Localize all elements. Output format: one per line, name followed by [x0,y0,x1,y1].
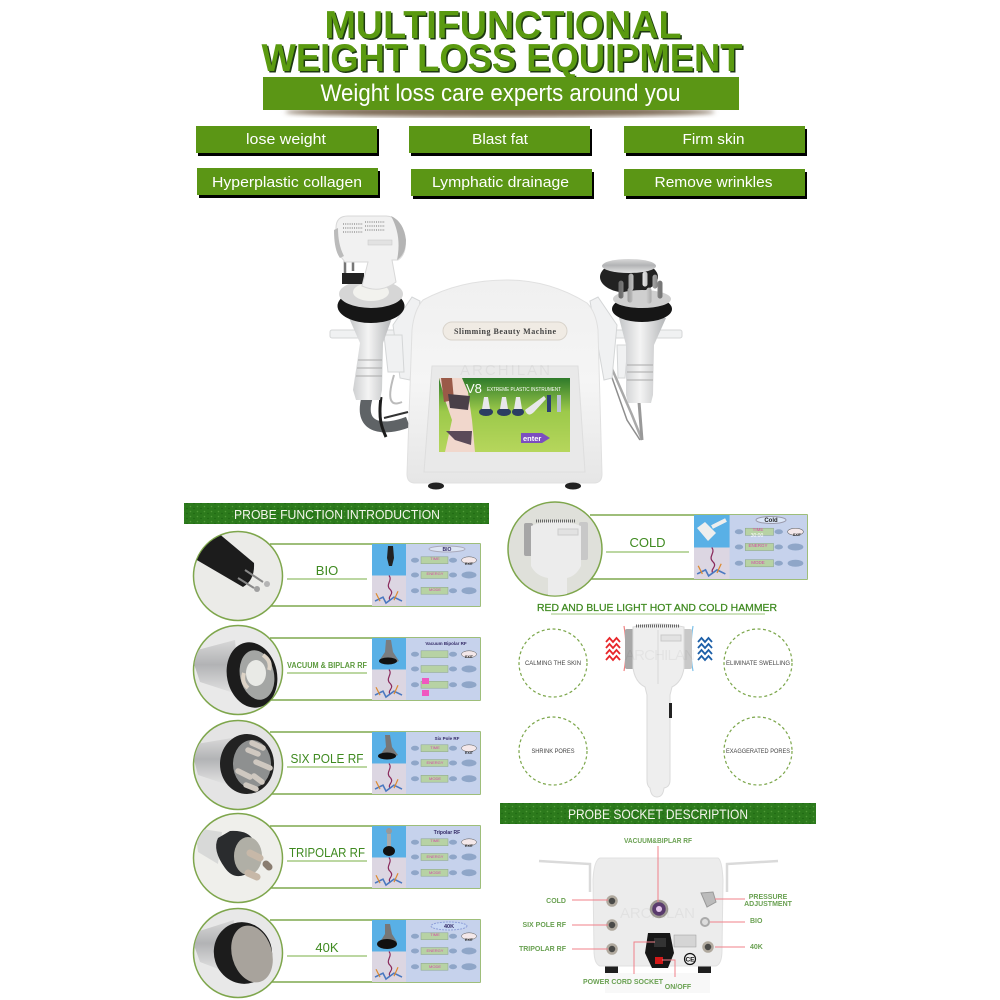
name plate [443,322,567,340]
left vacuum probe [338,280,404,400]
button: firm skin: Firm skin [682,131,744,148]
screen: BIO: ENERGY [427,571,444,576]
name plate: Slimming Beauty Machine [454,327,556,336]
bezel [424,366,585,472]
screen: cold [694,515,807,579]
screen: six pole RF: EXIT [465,751,474,755]
button: lose weight: lose weight [246,131,327,148]
callout: exaggerated pores [724,717,792,785]
screen: tripolar RF: MODE [429,870,441,875]
label: power cord socket: POWER CORD SOCKET [583,979,664,986]
screen: cold: Cold [764,518,778,524]
screen: six pole RF: Six Pole RF [435,736,460,741]
photo circle: six pole RF [190,720,282,810]
screen: 40K: ENERGY [427,948,444,953]
subtitle banner [263,77,739,117]
power panel [645,933,674,968]
rear feet [605,965,711,973]
screen: cold: ENERGY [748,543,768,548]
screen: six pole RF: TIME [430,745,440,750]
reflection [605,973,710,993]
CE mark [684,954,696,964]
label: 40K: 40K [315,940,339,955]
screen: 40K [372,920,480,982]
label: BIO: BIO [316,563,338,578]
screen: BIO: EXIT [465,562,474,566]
main machine photo [330,216,682,490]
screen: six pole RF [372,732,480,794]
callout: shrink pores [519,717,587,785]
label: cold: COLD [629,535,666,550]
acrylic holders [330,297,682,380]
sockets [608,896,712,954]
CE mark: CE [685,956,695,964]
screen: 40K: EXIT [465,938,474,942]
screen: BIO: BIO [443,547,452,553]
screen: vacuum and biplar RF: Vacuum Bipolar RF [425,641,467,646]
icon: blue cold waves [691,626,712,671]
callout: eliminate swelling [724,629,792,697]
screen: 40K: 40K [444,924,454,930]
callout: exaggerated pores: EXAGGERATED PORES [726,749,790,755]
screen: vacuum and biplar RF [372,638,480,700]
screen: 40K: TIME [430,932,440,937]
machine cables [365,355,642,440]
screen: tripolar RF [372,826,480,888]
screen: tripolar RF: Tripolar RF [434,830,460,836]
button: firm skin [624,126,807,156]
section header: probe function introduction [184,503,489,524]
photo circle: 40K [190,908,282,998]
section header: probe socket description: PROBE SOCKET DESCRIPTION [568,806,748,822]
probe row: six pole RF [190,720,480,810]
button: remove wrinkles [624,169,807,199]
screen: six pole RF: ENERGY [427,760,444,765]
screen: cold: TIME [753,527,763,532]
device rear photo [539,858,778,993]
button: hyperplastic collagen: Hyperplastic collagen [212,174,362,191]
hammer device [625,624,692,797]
button: blast fat: Blast fat [472,131,529,148]
probe row: 40K [190,908,480,998]
button: hyperplastic collagen [197,168,380,198]
photo circle: BIO [190,532,282,620]
label: vacuum and biplar RF: VACUUM & BIPLAR RF [287,661,367,670]
label: tripolar socket: TRIPOLAR RF [519,946,567,953]
watermarks: ARCHILAN [625,647,695,664]
photo circle: vacuum and biplar RF [190,626,283,714]
benefit buttons [196,126,807,199]
watermarks [460,362,695,922]
screen: BIO: MODE [429,587,441,592]
machine body [407,280,602,483]
screen: tripolar RF: TIME [430,838,440,843]
button: lymphatic drainage [411,169,594,199]
title [262,4,744,82]
cold hammer on holder [334,216,406,289]
watermarks: ARCHILAN [620,905,695,922]
callout: shrink pores: SHRINK PORES [532,749,574,755]
machine screen: enter [523,434,541,443]
screen: six pole RF: MODE [429,776,441,781]
machine feet [428,482,581,490]
label: bio socket: BIO [750,918,763,925]
screen: BIO [372,544,480,606]
photo circle: cold [508,502,602,600]
section header: probe function introduction: PROBE FUNCTION INTRODUCTION [234,507,440,522]
subtitle banner: Weight loss care experts around you [320,80,680,107]
probe row: cold [508,502,807,600]
label: six pole socket: SIX POLE RF [522,922,567,929]
label: six pole RF: SIX POLE RF [290,751,364,766]
socket labels [519,838,793,991]
rear wings [539,861,778,892]
screen: 40K: MODE [429,964,441,969]
screen: cold: 30:00 [751,533,763,539]
callout: calming the skin: CALMING THE SKIN [525,661,581,667]
callout: eliminate swelling: ELIMINATE SWELLING [726,661,790,667]
label: cold socket: COLD [546,898,566,905]
section header: probe socket description [500,803,816,824]
watermarks: ARCHILAN [460,362,550,379]
label: vacuum biplar: VACUUM&BIPLAR RF [624,838,693,845]
heading: red and blue light hammer: RED AND BLUE LIGHT HOT AND COLD HAMMER [537,602,777,614]
machine screen: V8 [466,381,482,396]
label: 40K socket: 40K [750,944,763,951]
button: remove wrinkles: Remove wrinkles [654,174,772,191]
screen: cold: MODE [751,560,765,565]
screen: BIO: TIME [430,556,440,561]
right probes [600,259,672,403]
probe row: tripolar RF [194,814,480,902]
screen: tripolar RF: ENERGY [427,854,444,859]
rating label [674,935,696,947]
probe row: vacuum and biplar RF [190,626,480,714]
machine screen: EXTREME PLASTIC INSTRUMENT [487,387,561,393]
title: WEIGHT LOSS EQUIPMENT [262,37,743,80]
screen: tripolar RF: EXIT [465,844,474,848]
rear body [593,858,723,966]
button: lose weight [196,126,379,156]
machine screen [439,378,570,452]
label: pressure adjustment [744,894,793,908]
screen: cold: EXIT [793,533,802,537]
label: tripolar RF: TRIPOLAR RF [289,845,365,860]
socket leader lines [572,846,745,977]
title: MULTIFUNCTIONAL [324,4,682,47]
button: blast fat [409,126,592,156]
probe row: BIO [190,532,480,620]
button: lymphatic drainage: Lymphatic drainage [432,174,569,191]
screen: vacuum and biplar RF: EXIT [465,655,474,659]
title: MULTIFUNCTIONAL [326,6,683,48]
title: WEIGHT LOSS EQUIPMENT [263,38,744,82]
label: pressure adjustment: ADJUSTMENT [744,901,793,908]
photo circle: tripolar RF [194,814,282,902]
label: on off: ON/OFF [665,984,692,991]
icon: red heat waves [606,626,626,671]
label: pressure adjustment: PRESSURE [749,894,788,901]
callout: calming the skin [519,629,587,697]
